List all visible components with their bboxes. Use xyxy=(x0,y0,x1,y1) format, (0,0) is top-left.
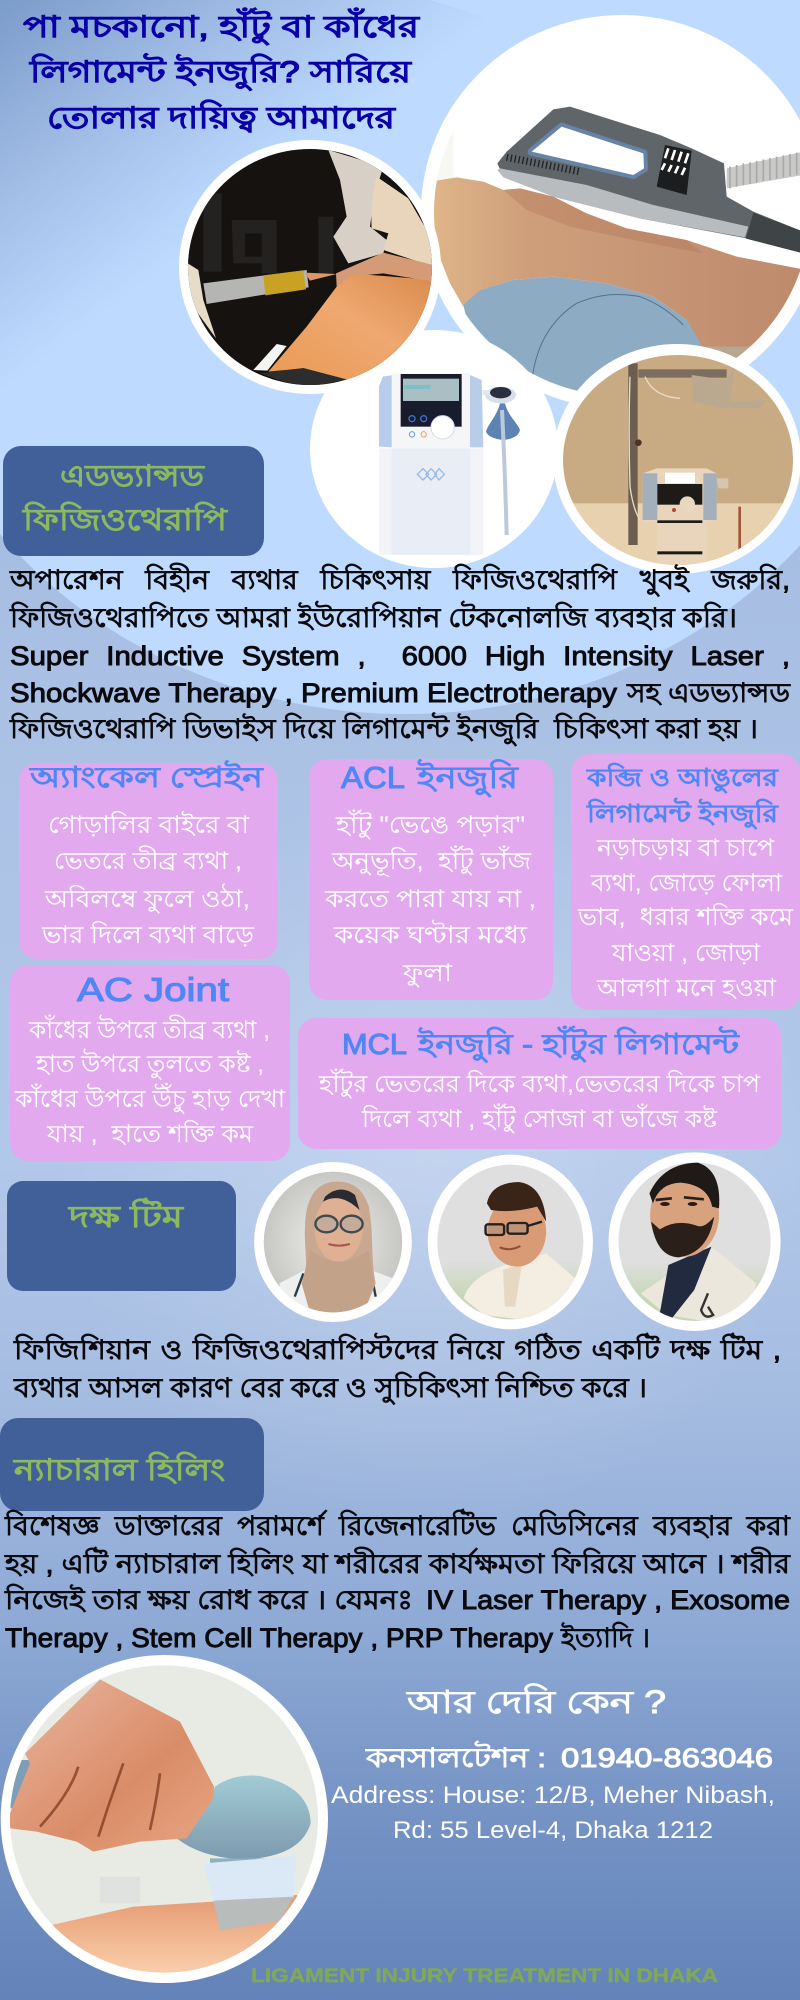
address: Address: House: 12/B, Meher Nibash, xyxy=(331,1782,775,1809)
heading: skilled team: দক্ষ টিম xyxy=(68,1198,185,1234)
paragraph: natural healing: IV Laser Therapy , Exosome xyxy=(426,1585,790,1615)
heading: natural healing xyxy=(0,1418,264,1511)
card: ACL injury: ফুলা xyxy=(402,960,453,987)
paragraph: advanced physiotherapy xyxy=(9,563,791,745)
card: ankle sprain: ভেতরে তীব্র ব্যথা , xyxy=(54,846,242,875)
paragraph: natural healing: নিজেই তার ক্ষয় রোধ করে । যেমনঃ xyxy=(4,1584,413,1615)
portrait: bearded doctor xyxy=(608,1152,781,1331)
paragraph: advanced physiotherapy: অপারেশন বিহীন ব্যথার চিকিৎসায় ফিজিওথেরাপি খুবই জরুরি, xyxy=(9,563,790,596)
card: AC joint: যায় , হাতে শক্তি কম xyxy=(46,1120,254,1148)
consultation label: কনসালটেশন : xyxy=(365,1741,546,1773)
paragraph: advanced physiotherapy: ফিজিওথেরাপিতে আমরা ইউরোপিয়ান টেকনোলজি ব্যবহার করি। xyxy=(9,601,737,633)
card: ankle sprain: ভার দিলে ব্যথা বাড়ে xyxy=(41,921,255,949)
card: wrist and finger ligament injury: আলগা মনে হওয়া xyxy=(596,975,777,1002)
card: wrist and finger ligament injury: কব্জি ও আঙুলের xyxy=(586,763,779,794)
card: ACL injury: অনুভূতি, হাঁটু ভাঁজ xyxy=(331,846,532,876)
card: AC joint: হাত উপরে তুলতে কষ্ট , xyxy=(35,1049,264,1079)
address xyxy=(331,1782,775,1844)
heading: skilled team xyxy=(7,1181,236,1291)
card: wrist and finger ligament injury: ভাব, ধরার শক্তি কমে xyxy=(577,903,794,931)
card: AC joint: AC Joint xyxy=(77,971,229,1008)
card: wrist and finger ligament injury xyxy=(571,754,800,1010)
heading: natural healing: ন্যাচারাল হিলিং xyxy=(13,1452,225,1487)
phone number: 01940-863046 xyxy=(561,1743,773,1773)
card: ACL injury: করতে পারা যায় না , xyxy=(324,886,536,913)
card: ankle sprain: অ্যাংকেল স্প্রেইন xyxy=(29,761,264,794)
title: তোলার দায়িত্ব আমাদের xyxy=(47,100,396,135)
card: MCL injury xyxy=(298,1018,781,1149)
paragraph: skilled team: ফিজিশিয়ান ও ফিজিওথেরাপিস্টদের নিয়ে গঠিত একটি দক্ষ টিম , xyxy=(13,1333,781,1365)
photo: device with handset xyxy=(310,330,558,568)
card: AC joint: কাঁধের উপরে তীব্র ব্যথা , xyxy=(28,1015,270,1044)
card: ankle sprain: গোড়ালির বাইরে বা xyxy=(48,811,250,839)
paragraph: advanced physiotherapy: ফিজিওথেরাপি ডিভাইস দিয়ে লিগামেন্ট ইনজুরি চিকিৎসা করা হয় । xyxy=(9,712,758,745)
paragraph: natural healing: ইত্যাদি । xyxy=(560,1622,650,1653)
paragraph: advanced physiotherapy: Super Inductive System , 6000 High Intensity Laser , xyxy=(10,641,790,671)
paragraph: advanced physiotherapy: Shockwave Therapy , Premium Electrotherapy xyxy=(10,678,618,708)
card: wrist and finger ligament injury: যাওয়া , জোড়া xyxy=(611,940,761,967)
heading: advanced physiotherapy: ফিজিওথেরাপি xyxy=(22,502,228,537)
card: ankle sprain xyxy=(19,761,278,959)
card: ACL injury: ইনজুরি xyxy=(416,759,519,796)
card: wrist and finger ligament injury: লিগামেন্ট ইনজুরি xyxy=(586,798,779,829)
footer title: LIGAMENT INJURY TREATMENT IN DHAKA xyxy=(251,1966,718,1987)
photo: hand-piece on leg xyxy=(421,15,800,409)
card: MCL injury: হাঁটুর ভেতরের দিকে ব্যথা,ভেতরের দিকে চাপ xyxy=(318,1069,761,1098)
contact block xyxy=(331,1683,775,1844)
title: পা মচকানো, হাঁটু বা কাঁধের xyxy=(23,8,420,45)
card: ankle sprain: অবিলম্বে ফুলে ওঠা, xyxy=(44,884,250,913)
portrait: female doctor xyxy=(254,1162,412,1322)
card: ACL injury xyxy=(309,759,553,1000)
address: Rd: 55 Level-4, Dhaka 1212 xyxy=(393,1817,713,1844)
paragraph: natural healing xyxy=(4,1509,791,1653)
paragraph: skilled team: ব্যথার আসল কারণ বের করে ও সুচিকিৎসা নিশ্চিত করে । xyxy=(13,1372,647,1404)
card: wrist and finger ligament injury: নড়াচড়ায় বা চাপে xyxy=(596,835,775,862)
portraits: doctors xyxy=(254,1152,781,1331)
title: লিগামেন্ট ইনজুরি? সারিয়ে xyxy=(29,54,413,90)
paragraph: natural healing: Therapy , Stem Cell Therapy , PRP Therapy xyxy=(5,1623,554,1653)
paragraph: advanced physiotherapy: সহ এডভ্যান্সড xyxy=(626,678,791,708)
portrait: male doctor with glasses xyxy=(428,1155,593,1329)
card: MCL injury: ইনজুরি - হাঁটুর লিগামেন্ট xyxy=(417,1026,740,1062)
paragraph: natural healing: হয় , এটি ন্যাচারাল হিলিং যা শরীরের কার্যক্ষমতা ফিরিয়ে আনে । শরীর xyxy=(4,1547,791,1579)
card: ACL injury: ACL xyxy=(341,760,405,795)
card: ACL injury: কয়েক ঘণ্টার মধ্যে xyxy=(333,920,528,949)
heading: advanced physiotherapy xyxy=(3,446,264,556)
card: MCL injury: MCL xyxy=(342,1029,407,1061)
card: wrist and finger ligament injury: ব্যথা, জোড়ে ফোলা xyxy=(590,870,783,897)
card: AC joint xyxy=(10,965,290,1161)
card: ACL injury: হাঁটু "ভেঙে পড়ার" xyxy=(335,810,525,839)
heading: advanced physiotherapy: এডভ্যান্সড xyxy=(60,460,205,493)
title xyxy=(23,8,420,135)
paragraph: skilled team xyxy=(13,1333,781,1404)
call to action heading: আর দেরি কেন ? xyxy=(406,1683,666,1720)
photo: injection xyxy=(179,140,441,394)
card: MCL injury: দিলে ব্যথা , হাঁটু সোজা বা ভাঁজে কষ্ট xyxy=(361,1104,718,1133)
card: AC joint: কাঁধের উপরে উঁচু হাড় দেখা xyxy=(14,1084,286,1113)
photo: shockwave hand-piece xyxy=(1,1655,328,1983)
paragraph: natural healing: বিশেষজ্ঞ ডাক্তারের পরামর্শে রিজেনারেটিভ মেডিসিনের ব্যবহার করা xyxy=(4,1509,791,1541)
photo: laser machine xyxy=(553,344,800,574)
